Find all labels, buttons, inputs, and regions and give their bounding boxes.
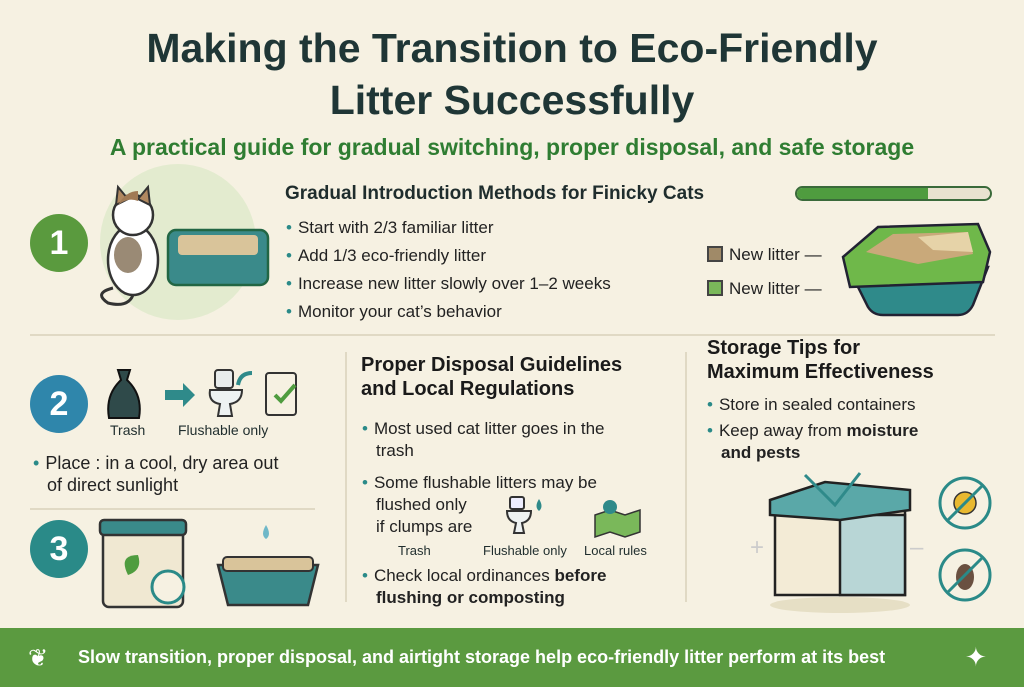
heading: disposal (361, 354, 622, 400)
subtitle: A practical guide for gradual switching, proper disposal, and safe storage (110, 134, 914, 160)
illustration: storage box (750, 472, 924, 613)
progress bar (795, 186, 992, 201)
bullet: check local (362, 565, 606, 609)
bullets disposal: if clumps are (376, 517, 472, 536)
legend: New litter — (729, 245, 822, 264)
bullets storage: and pests (721, 443, 800, 462)
bullets storage: Store in sealed containers (719, 395, 916, 414)
bullet section 2: of direct sunlight (47, 475, 178, 495)
bullets section 1: Start with 2/3 familiar litter (298, 218, 494, 237)
section 1 number: 1 (50, 224, 68, 262)
illustration: storage box: – (910, 534, 924, 561)
bullets disposal (362, 419, 605, 536)
icon labels: Trash (110, 422, 145, 438)
title (146, 25, 878, 123)
legend (707, 245, 822, 298)
section 3 number (30, 520, 88, 578)
illustration: cat with litter box (100, 164, 270, 320)
heading: gradual introduction: Gradual Introduction Methods for Finicky Cats (285, 183, 704, 204)
bullet: check local: flushing or composting (376, 588, 565, 607)
title: Making the Transition to Eco-Friendly (146, 25, 878, 71)
bullets disposal: Some flushable litters may be (374, 473, 597, 492)
text: Flushable only (178, 422, 268, 438)
bullet section 2 (33, 452, 323, 496)
heading: disposal: and Local Regulations (361, 378, 574, 400)
icon labels disposal: Trash (398, 543, 431, 558)
bullets disposal: trash (376, 441, 414, 460)
bullets storage (708, 395, 918, 462)
section 1 number (30, 214, 88, 272)
icons: no sun, no pests (938, 476, 992, 602)
bullets disposal: Most used cat litter goes in the (374, 419, 605, 438)
icons: toilet and map (506, 496, 641, 538)
illustration: storage box: + (750, 534, 764, 561)
heading: storage: Maximum Effectiveness (707, 361, 934, 383)
bullets section 1: Add 1/3 eco-friendly litter (298, 246, 486, 265)
illustration: mixed litter box (842, 222, 992, 316)
footer text: Slow transition, proper disposal, and airtight storage help eco-friendly litter perform at its best (78, 647, 885, 667)
heading: disposal: Proper Disposal Guidelines (361, 354, 622, 376)
footer banner (0, 628, 1024, 687)
bullets section 1: Monitor your cat’s behavior (298, 302, 502, 321)
bullet: check local: Check local ordinances before (374, 566, 606, 585)
icon: sparkle: ✦ (965, 642, 987, 672)
bullets section 1: Increase new litter slowly over 1–2 weeks (298, 274, 611, 293)
section 3 number: 3 (50, 530, 68, 568)
bullets section 1 (286, 218, 611, 321)
illustration: bin and litter box (98, 518, 320, 608)
heading: storage (707, 337, 934, 383)
text: Local rules (584, 543, 647, 558)
section 2 number (30, 375, 88, 433)
bullets disposal: flushed only (376, 495, 467, 514)
bullets storage: Keep away from moisture (719, 421, 918, 440)
section 2 number: 2 (50, 385, 68, 423)
heading: storage: Storage Tips for (707, 337, 860, 359)
icon: leaf hand: ❦ (28, 645, 48, 672)
icons: disposal (107, 369, 297, 419)
legend: New litter — (729, 279, 822, 298)
bullet section 2: Place : in a cool, dry area out (45, 453, 278, 473)
text: Flushable only (483, 543, 567, 558)
divider lines (30, 334, 995, 336)
title: Litter Successfully (330, 77, 694, 123)
